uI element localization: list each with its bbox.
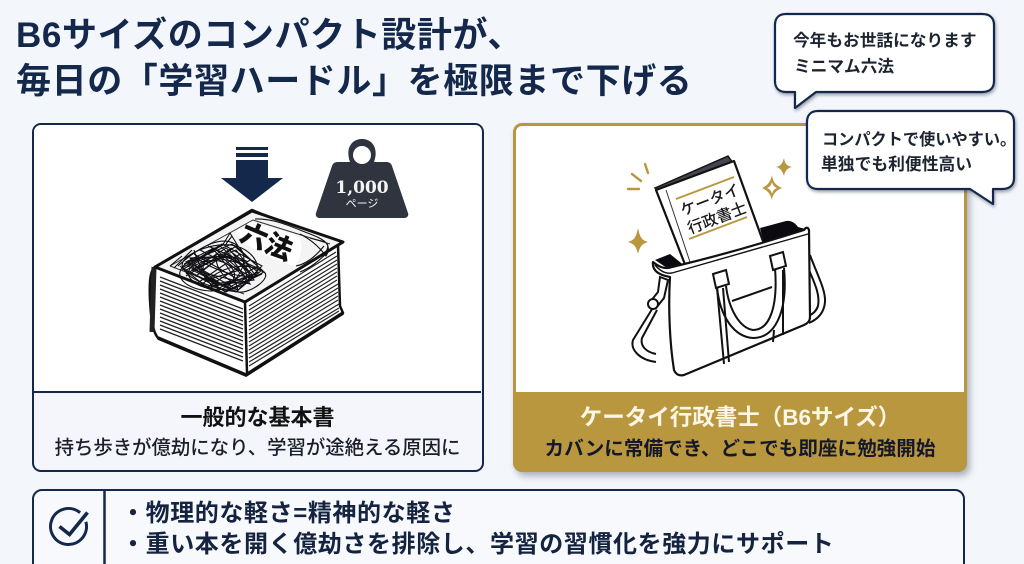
shine marks — [628, 164, 648, 189]
book left pages — [160, 277, 243, 361]
speech bubble: compact and easy: コンパクトで使いやすい。 — [822, 131, 1016, 149]
book in bag: ケータイ — [678, 181, 742, 220]
scribbles on cover — [170, 219, 330, 292]
takeaway text: ・物理的な軽さ=精神的な軽さ — [121, 500, 455, 527]
book in bag — [655, 156, 764, 267]
heading: general textbook: 一般的な基本書 — [180, 405, 334, 430]
speech bubble: compact and easy — [805, 110, 1018, 208]
icon: weight 1,000 pages: 1,000 — [335, 178, 389, 198]
illustration area: heavy book — [34, 125, 481, 393]
title: B6サイズのコンパクト設計が、 — [16, 16, 523, 55]
speech bubble: this year too: 今年もお世話になります — [793, 30, 977, 50]
illustration area: bag — [516, 126, 964, 392]
speech bubble: this year too — [773, 12, 998, 112]
title — [16, 16, 692, 101]
speech bubble: compact and easy: 単独でも利便性高い — [821, 154, 972, 174]
title: 毎日の「学習ハードル」を極限まで下げる — [16, 62, 692, 101]
book in bag: 行政書士 — [685, 199, 749, 238]
icon: down arrow — [221, 147, 283, 202]
speech bubble: this year too: ミニマム六法 — [794, 57, 894, 76]
takeaway text: ・重い本を開く億劫さを排除し、学習の習慣化を強力にサポート — [121, 530, 834, 558]
bag pocket and handles — [713, 252, 786, 364]
bag interior — [655, 221, 809, 270]
caption: B6 size: カバンに常備でき、どこでも即座に勉強開始 — [545, 438, 935, 460]
panel: takeaway — [32, 489, 965, 564]
takeaway text — [121, 500, 834, 558]
icon: weight 1,000 pages — [316, 139, 408, 218]
caption: general textbook: 持ち歩きが億劫になり、学習が途絶える原因に — [55, 437, 460, 459]
book top cover — [155, 211, 343, 302]
icon: check circle — [49, 491, 106, 564]
heading: B6 size: ケータイ行政書士（B6サイズ） — [580, 405, 900, 430]
book spine — [150, 210, 343, 375]
panel: general textbook — [32, 123, 484, 472]
bag shoulder strap — [632, 255, 825, 362]
icon: weight 1,000 pages: ページ — [346, 198, 378, 210]
sparkles — [628, 158, 792, 254]
illustration: thick roppo book — [148, 208, 344, 377]
bag body — [653, 228, 810, 375]
roppo label: 六法 — [236, 218, 297, 267]
book right pages — [249, 252, 339, 366]
illustration: bag with book — [626, 155, 826, 376]
panel: B6 keitai gyoseishoshi — [513, 123, 967, 472]
